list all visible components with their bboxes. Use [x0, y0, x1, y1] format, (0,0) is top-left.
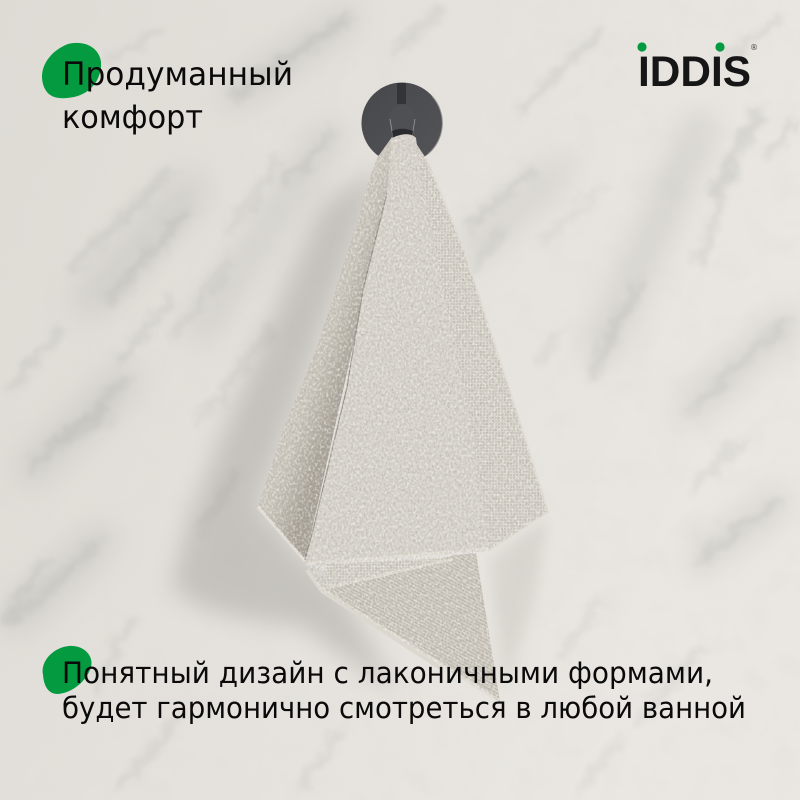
towel shadow on wall	[172, 165, 548, 695]
towel	[250, 130, 555, 710]
green accent blob: description	[43, 646, 92, 694]
towel middle flap	[322, 558, 453, 588]
logo registered mark: ®	[750, 43, 758, 52]
towel left panel	[258, 137, 400, 561]
heading	[62, 55, 293, 136]
description text	[62, 656, 746, 725]
hook knob	[388, 105, 415, 138]
towel fabric texture	[250, 130, 555, 710]
logo: IDDIS: IDDIS	[638, 49, 751, 96]
towel back lower triangle	[322, 553, 500, 702]
towel right panel	[412, 137, 548, 551]
description text: будет гармонично смотреться в любой ванной	[62, 691, 746, 725]
hook stem	[397, 83, 406, 104]
heading: комфорт	[62, 98, 203, 136]
towel front panel	[305, 134, 490, 565]
green accent blob: heading	[42, 43, 101, 98]
logo green dots	[637, 42, 725, 52]
description text: Понятный дизайн с лаконичными формами,	[62, 656, 713, 690]
heading: Продуманный	[62, 55, 293, 93]
towel hook	[362, 82, 442, 164]
hook round plate	[362, 82, 442, 164]
